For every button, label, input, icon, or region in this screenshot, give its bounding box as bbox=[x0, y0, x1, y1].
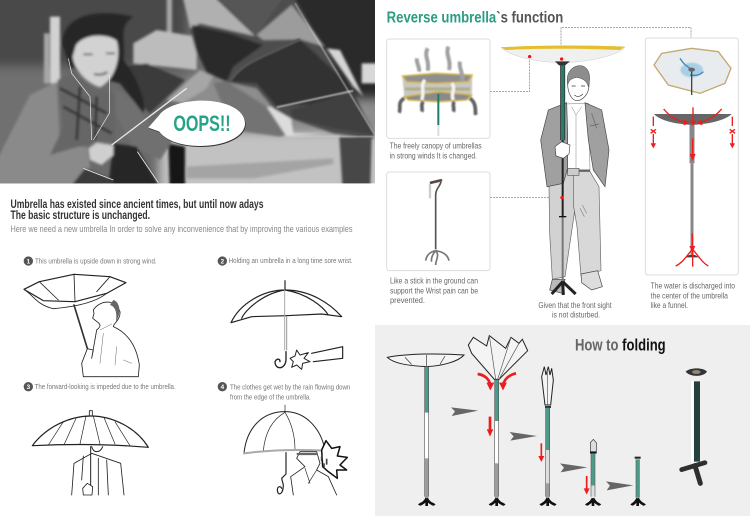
panel: strong wind canopy bbox=[387, 39, 490, 138]
item 1: umbrella upside down bbox=[24, 256, 157, 377]
caption: stick support bbox=[390, 275, 478, 305]
caption: water funnel: the center of the umbrella bbox=[651, 290, 728, 300]
umbrella ribs bbox=[230, 3, 375, 137]
step 4: shortened bbox=[584, 439, 600, 506]
item 2: sore wrist bbox=[218, 256, 353, 369]
step 2: canopy closing bbox=[468, 336, 528, 506]
step 1: open umbrella bbox=[387, 354, 464, 506]
OOPS text: OOPS!! bbox=[173, 111, 231, 136]
reversed canopy bbox=[501, 47, 625, 63]
scarf bbox=[50, 78, 76, 155]
right trouser leg bbox=[574, 170, 601, 276]
umbrella pole bbox=[555, 65, 570, 140]
item 1: umbrella upside down: 1 bbox=[27, 258, 31, 265]
panel: walking stick bbox=[387, 172, 490, 271]
hand bbox=[555, 142, 570, 158]
woman's sweater and arm bbox=[0, 82, 90, 183]
item 3: view blocked: The forward-looking is impeded due to the umbrella. bbox=[35, 382, 176, 391]
shirt bbox=[565, 103, 590, 171]
panel: water funnel bbox=[645, 38, 738, 275]
section title: Reverse umbrella`s function bbox=[387, 9, 563, 26]
step 3: folded canopy bbox=[538, 367, 555, 506]
intro heading: The basic structure is unchanged. bbox=[10, 210, 150, 222]
intro subtext: Here we need a new umbrella In order to solve any inconvenience that by improving the various examples bbox=[10, 224, 353, 235]
intro heading: Umbrella has existed since ancient times, but until now adays bbox=[10, 199, 264, 211]
step 5: fully folded bbox=[632, 458, 645, 506]
item 3: view blocked: 3 bbox=[27, 384, 31, 391]
item 4: clothes wet: The clothes get wet by the rain flowing down bbox=[230, 382, 350, 391]
shoes bbox=[550, 279, 565, 293]
caption: front sight: is not disturbed. bbox=[552, 310, 600, 320]
panel: four inconveniences bbox=[24, 256, 353, 495]
left trouser leg bbox=[549, 170, 575, 279]
jacket bbox=[541, 103, 568, 187]
caption: front sight bbox=[538, 300, 612, 320]
man holding the reverse umbrella bbox=[501, 45, 625, 295]
bag bbox=[108, 142, 160, 184]
hair bbox=[62, 13, 144, 113]
panel: how to folding bbox=[375, 325, 750, 516]
red arrow bbox=[539, 443, 544, 457]
face bbox=[73, 36, 118, 87]
foot stand bbox=[552, 282, 576, 295]
item 2: sore wrist: 2 bbox=[221, 258, 225, 265]
heading: How to folding bbox=[575, 336, 666, 355]
item 4: clothes wet: from the edge of the umbrella. bbox=[230, 393, 311, 402]
arrow 1 bbox=[451, 407, 478, 416]
arrow 4 bbox=[606, 481, 633, 490]
red arrow bbox=[584, 476, 589, 489]
umbrella shaft and earphone wires bbox=[112, 88, 187, 145]
red water arrows bbox=[651, 107, 735, 267]
photo: woman with umbrella blown by the wind bbox=[0, 0, 375, 184]
head bbox=[568, 71, 589, 101]
caption: strong winds bbox=[390, 141, 482, 161]
speech bubble bbox=[148, 101, 246, 147]
caption: front sight: Given that the front sight bbox=[538, 300, 612, 310]
item 4: clothes wet: 4 bbox=[221, 384, 225, 391]
caption: stick support: prevented. bbox=[390, 295, 425, 305]
item 2: sore wrist: Holding an umbrella in a long time sore wrist. bbox=[229, 256, 353, 265]
intro heading bbox=[10, 199, 264, 222]
item 1: umbrella upside down: This umbrella is upside down in strong wind. bbox=[35, 256, 157, 265]
product render: folded umbrella bbox=[682, 368, 707, 483]
caption: water funnel: like a funnel. bbox=[651, 300, 688, 310]
item 4: clothes wet bbox=[218, 382, 350, 495]
caption: stick support: support the Wrist pain can be bbox=[390, 285, 478, 295]
caption: stick support: Like a stick in the ground can bbox=[390, 275, 478, 285]
arrow 2 bbox=[510, 432, 537, 441]
caption: strong winds: in strong winds It is changed. bbox=[390, 151, 477, 161]
red fold arrows bbox=[478, 373, 516, 435]
caption: strong winds: The freely canopy of umbrellas bbox=[390, 141, 482, 151]
item 3: view blocked bbox=[24, 382, 176, 495]
canopy side view bbox=[654, 114, 732, 125]
panel: reverse umbrella function bbox=[387, 9, 738, 320]
hand bbox=[88, 143, 113, 165]
leader lines bbox=[490, 27, 691, 197]
red markers bbox=[528, 55, 564, 199]
canopy top view bbox=[654, 48, 731, 93]
arrow 3 bbox=[560, 463, 587, 472]
caption: water funnel bbox=[651, 280, 735, 310]
big umbrella panels bbox=[180, 0, 375, 139]
